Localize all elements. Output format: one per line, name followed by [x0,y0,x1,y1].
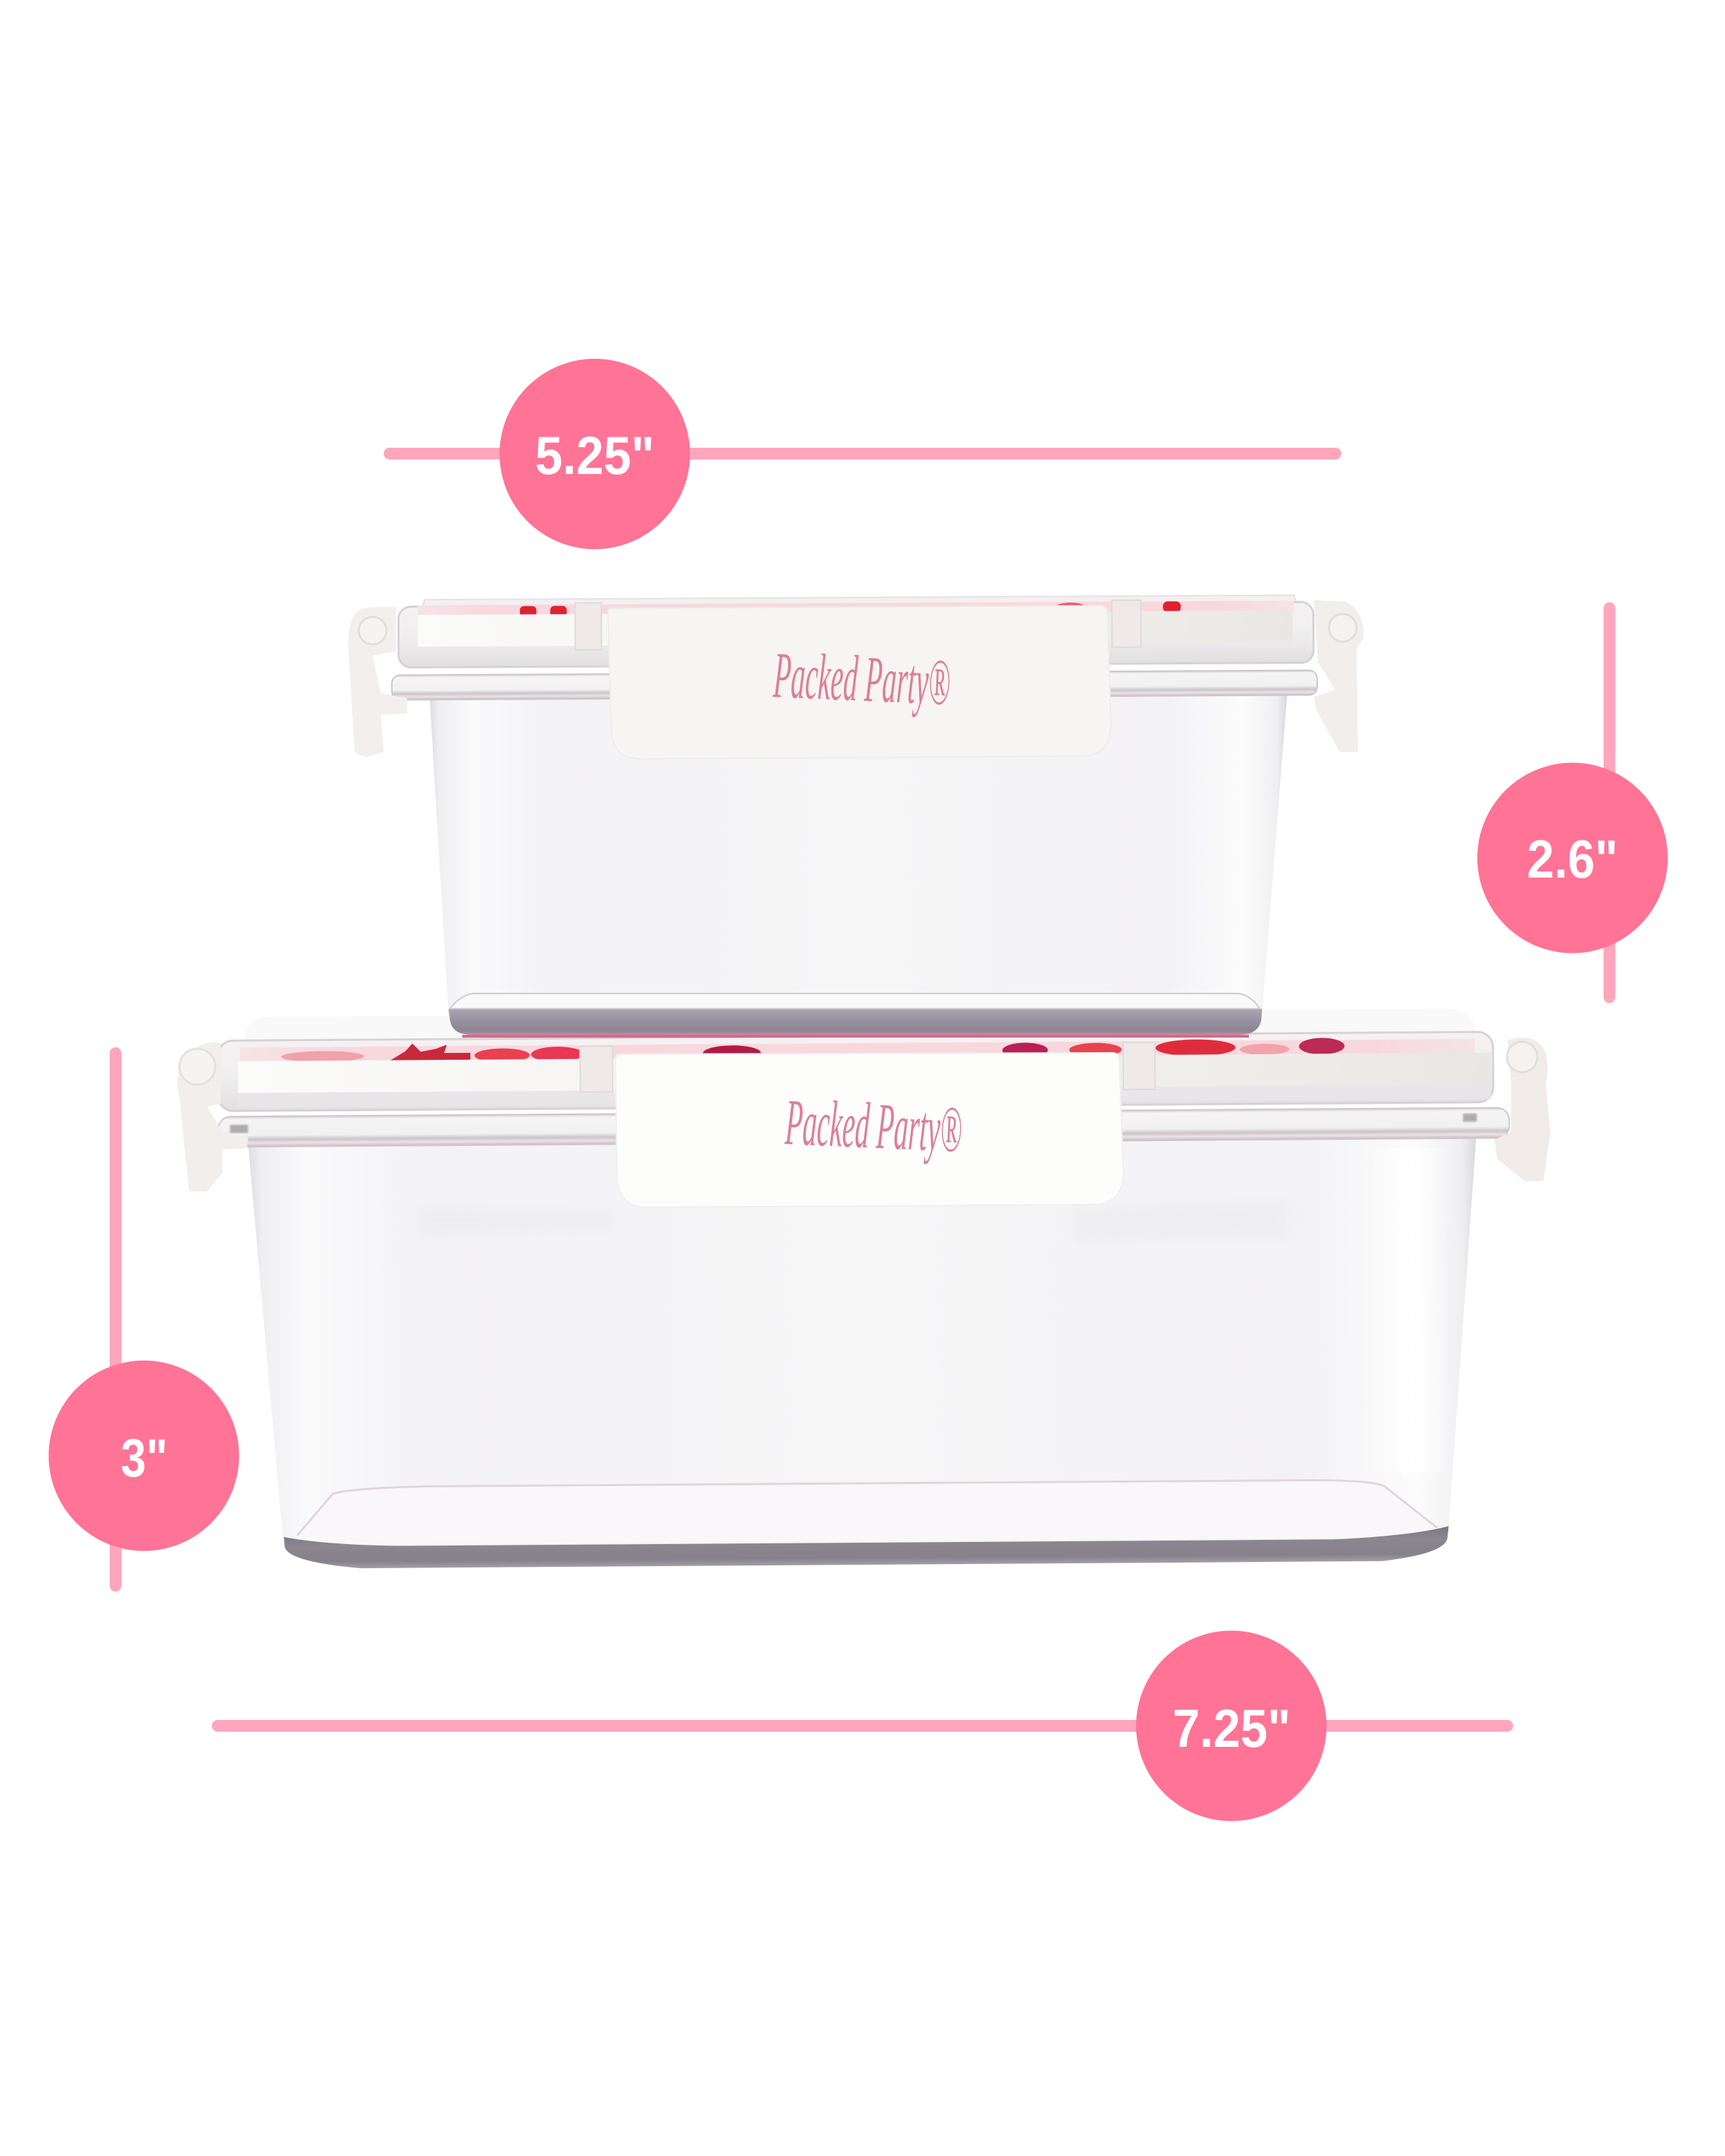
small container left clasp [348,607,407,758]
large container floor back edge [297,1479,1437,1536]
large container rim reflections [230,1114,1477,1133]
small container right clasp [1314,600,1363,752]
dimension value: 3" [121,1427,168,1488]
dimension badge [1136,1631,1326,1821]
small container label [608,606,1111,759]
dimension value: 5.25" [535,425,654,486]
small container pink reflection [462,1035,1249,1038]
right hinge [1507,1042,1537,1072]
large container pink lid strip [240,1039,1475,1062]
large container label [615,1053,1123,1207]
large container lid rim [218,1107,1510,1147]
large container right clasp [1495,1038,1550,1181]
small container base [448,1009,1262,1035]
large container white gasket band [238,1053,1491,1093]
large container band under gasket [238,1085,1491,1108]
large container [177,1008,1550,1569]
small container lid top plate [422,595,1297,608]
dimension line [384,448,1341,459]
large container clear lid band [218,1032,1493,1111]
left hinge [359,617,386,644]
dimension value: 2.6" [1527,829,1618,889]
small container pink strip [417,601,1294,616]
small container label: Packed Party® [772,638,952,719]
dimension: large container height 3 inches [48,1047,239,1592]
large container body [247,1127,1480,1569]
large container label: Packed Party® [784,1085,963,1166]
small container white gasket band [417,611,1293,646]
small container clear lid band [398,602,1314,667]
small container lid rim [392,670,1317,700]
dimension badge [500,359,690,549]
dimension line [1604,602,1615,1003]
large container base [284,1526,1449,1569]
large container left clasp [177,1042,248,1191]
dimension badge [1477,763,1668,953]
large container floor [297,1479,1437,1545]
dimension badge [48,1361,239,1551]
large container wall highlight [1369,1148,1454,1473]
large container lid plate [244,1009,1475,1042]
dimension value: 7.25" [1173,1698,1290,1759]
small container body [429,690,1288,1035]
right hinge [1329,614,1357,642]
small container lid [391,595,1317,700]
dimension line [212,1720,1513,1732]
dimension: small container width 5.25 inches [384,359,1341,549]
dimension line [110,1047,121,1592]
small container red jewels [520,602,1181,617]
large container lid clips [580,1042,1155,1094]
dimension: large container width 7.25 inches [212,1631,1513,1821]
large container jewels [282,1037,1345,1064]
small container floor [450,993,1260,1009]
small container lid clips [575,600,1141,650]
small container [348,595,1363,1038]
large container inner shadow panels [420,1200,1288,1248]
dimension: small container height 2.6 inches [1477,602,1668,1003]
left hinge [179,1049,215,1085]
